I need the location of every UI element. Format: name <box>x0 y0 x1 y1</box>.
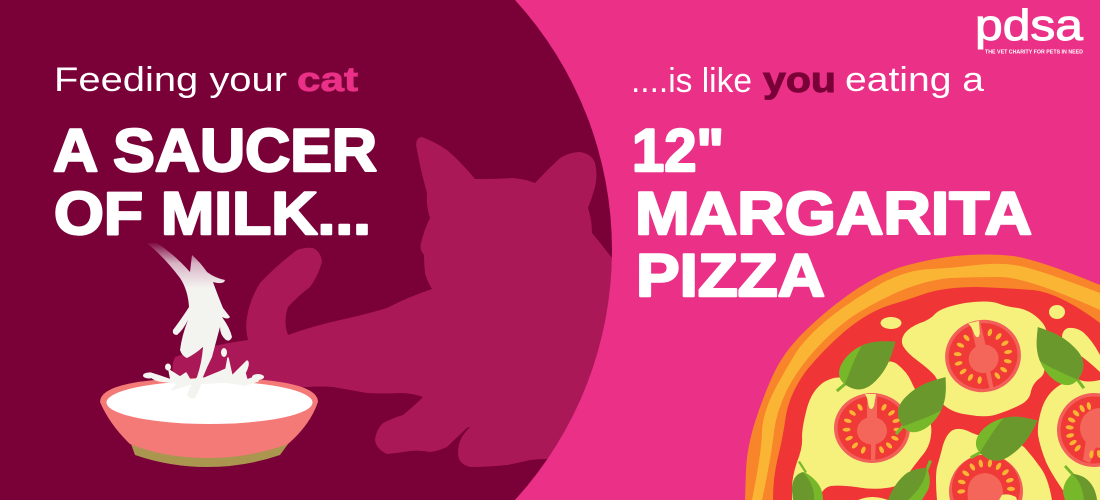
intro text: is like you eating a: eating a <box>845 61 984 99</box>
crust highlight <box>752 264 1100 500</box>
intro text: is like you eating a: ....is like <box>631 62 752 100</box>
milk surface <box>106 381 312 424</box>
heading: a saucer of milk: OF MILK... <box>54 180 371 247</box>
tomato slices <box>834 312 1100 500</box>
heading: 12 inch margarita pizza: 12" <box>632 117 724 184</box>
intro text: is like you eating a <box>631 59 984 100</box>
basil leaves <box>792 317 1098 500</box>
mozzarella <box>792 302 1100 500</box>
saucer base <box>131 444 288 467</box>
saucer bowl <box>100 378 318 458</box>
milk splash <box>143 348 264 390</box>
heading: a saucer of milk: A SAUCER <box>53 117 377 184</box>
intro text: is like you eating a: you <box>763 59 836 100</box>
intro text: feeding your cat <box>54 61 358 99</box>
illustration: saucer of milk <box>100 243 318 467</box>
heading: a saucer of milk <box>53 117 377 247</box>
heading: 12 inch margarita pizza: MARGARITA <box>635 180 1032 247</box>
heading: 12 inch margarita pizza: PIZZA <box>636 242 825 309</box>
illustration: pizza <box>745 254 1100 500</box>
panel: pink background <box>515 0 1100 500</box>
outer crust <box>745 254 1100 500</box>
cat silhouette <box>172 137 612 467</box>
intro text: feeding your cat: cat <box>297 61 358 99</box>
inner crust <box>762 277 1100 500</box>
milk stream <box>147 243 232 399</box>
logo: pdsa: pdsa <box>975 1 1084 50</box>
heading: 12 inch margarita pizza <box>632 117 1032 309</box>
tomato sauce <box>773 287 1100 500</box>
intro text: feeding your cat: Feeding your <box>54 61 287 99</box>
logo: pdsa: THE VET CHARITY FOR PETS IN NEED <box>985 50 1083 56</box>
